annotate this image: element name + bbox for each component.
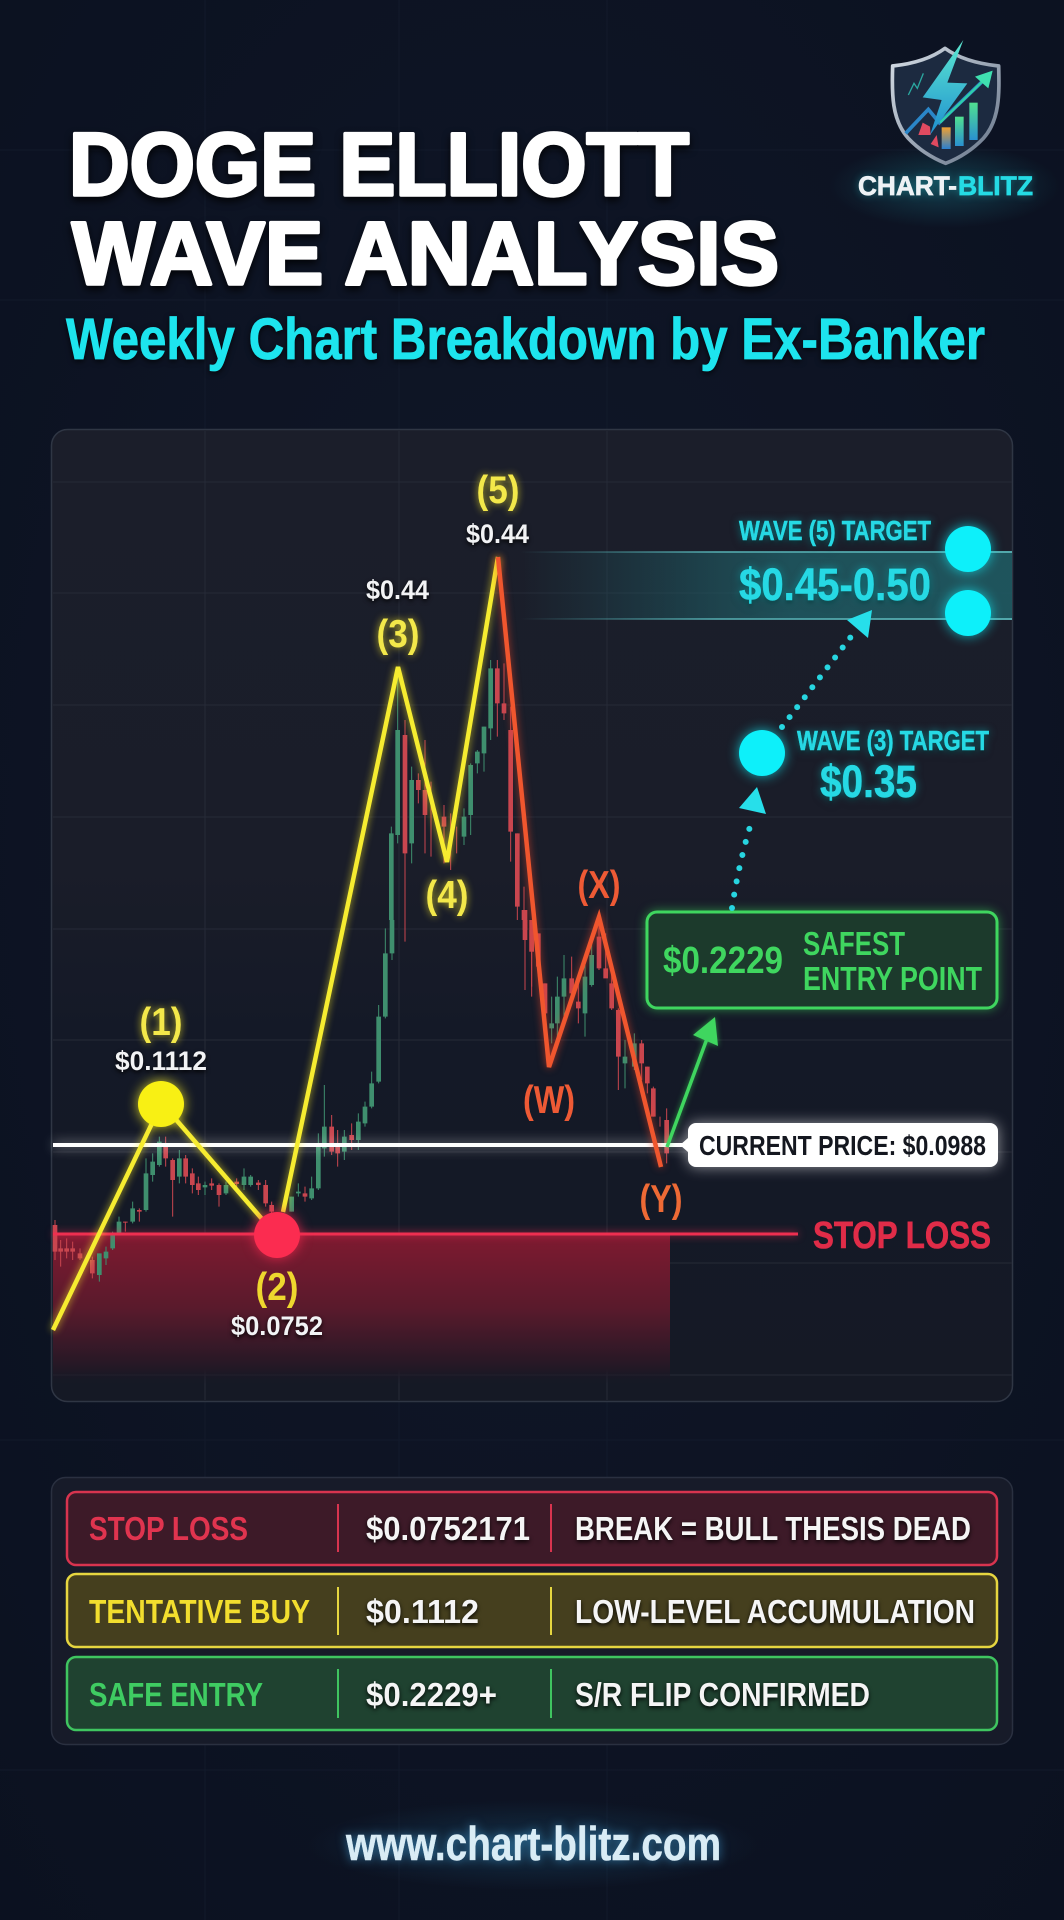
label: wave 3 target [797, 725, 989, 807]
label: wave 1: (1) [140, 1001, 182, 1044]
label: wave 5 target: WAVE (5) TARGET [739, 515, 931, 546]
logo wordmark: CHART- [858, 171, 957, 201]
title: WAVE ANALYSIS [72, 203, 779, 303]
label: wave 2: $0.0752 [231, 1311, 323, 1341]
wave line: correction W-X-Y [498, 557, 661, 1167]
icon: shield with lightning bolt [892, 40, 999, 163]
callout: safest entry point: $0.2229 [663, 940, 783, 982]
row: tentative buy: LOW-LEVEL ACCUMULATION [575, 1593, 975, 1630]
arrow: dotted to wave 5 target [782, 610, 872, 727]
current price line [53, 1143, 685, 1147]
row: tentative buy [67, 1574, 997, 1647]
row: safe entry: SAFE ENTRY [89, 1676, 263, 1713]
logo wordmark [858, 171, 1033, 201]
label: wave 4: (4) [426, 874, 468, 917]
row: safe entry [67, 1657, 997, 1730]
panel: levels table [52, 1478, 1012, 1744]
label: wave 5 target [739, 515, 931, 610]
panel: chart [52, 430, 1012, 1402]
row: stop loss: STOP LOSS [89, 1510, 248, 1547]
row: stop loss: BREAK = BULL THESIS DEAD [575, 1510, 971, 1547]
label: wave 5: (5) [476, 469, 520, 512]
label: wave 3 target: WAVE (3) TARGET [797, 725, 989, 756]
callout: safest entry point [647, 912, 997, 1008]
title: DOGE ELLIOTT [69, 114, 689, 214]
row: stop loss: $0.0752171 [366, 1510, 530, 1547]
arrow: green to safest entry [667, 1017, 718, 1147]
callout: safest entry point: ENTRY POINT [803, 960, 982, 997]
logo [830, 40, 1060, 228]
nodes: wave 5 target range [945, 526, 991, 636]
stop loss red zone [53, 1234, 670, 1384]
target zone band [520, 551, 1012, 620]
callout: current price [680, 1123, 998, 1167]
node: wave 1 [138, 1081, 184, 1127]
label: wave 2: (2) [256, 1266, 298, 1309]
label: wave 5 [466, 469, 529, 549]
node: wave 2 [254, 1212, 300, 1258]
label: wave W: (W) [523, 1079, 575, 1122]
label: wave 3 [366, 575, 429, 656]
label: stop loss: STOP LOSS [813, 1215, 991, 1257]
node: wave 3 target [739, 730, 785, 776]
label: wave 2 [231, 1266, 323, 1341]
footer url: www.chart-blitz.com [345, 1817, 721, 1870]
callout: safest entry point: SAFEST [803, 925, 905, 962]
footer url [308, 1800, 758, 1890]
row: tentative buy: $0.1112 [366, 1593, 479, 1630]
wave line: impulse 1-5 [53, 557, 498, 1330]
stop loss line [53, 1232, 798, 1236]
logo wordmark: BLITZ [958, 171, 1033, 201]
row: stop loss [67, 1492, 997, 1565]
label: wave 1: $0.1112 [115, 1046, 207, 1076]
row: safe entry: $0.2229+ [366, 1676, 497, 1713]
row: tentative buy: TENTATIVE BUY [89, 1593, 310, 1630]
callout: current price: CURRENT PRICE: $0.0988 [699, 1130, 986, 1161]
label: wave 3: (3) [376, 613, 420, 656]
label: wave 3 target: $0.35 [820, 756, 917, 807]
label: wave 5 target: $0.45-0.50 [739, 559, 931, 610]
label: wave 1 [115, 1001, 207, 1076]
title [69, 114, 779, 303]
candlesticks [55, 660, 667, 1282]
arrow: dotted to wave 3 target [732, 787, 766, 908]
label: wave X: (X) [578, 864, 620, 907]
label: wave Y: (Y) [640, 1178, 682, 1221]
row: safe entry: S/R FLIP CONFIRMED [575, 1676, 870, 1713]
label: wave 5: $0.44 [466, 519, 529, 549]
label: wave 3: $0.44 [366, 575, 429, 605]
